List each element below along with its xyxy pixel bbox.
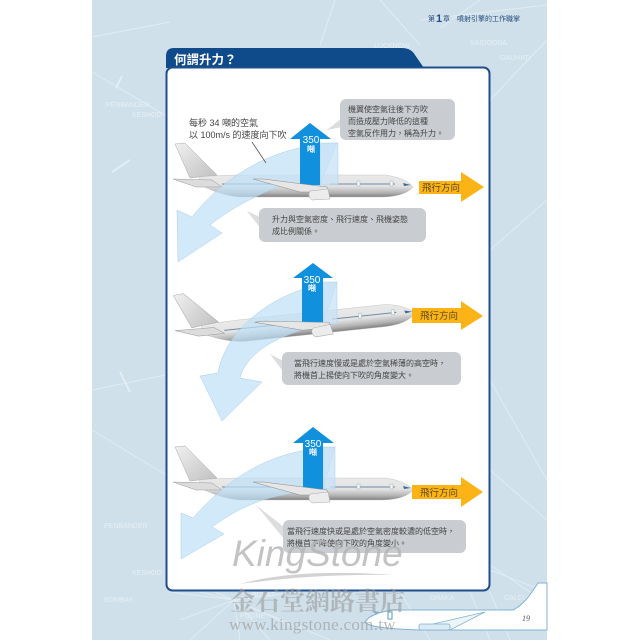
page background: KESHOD xyxy=(132,570,162,577)
callout: fast flight: 將機首下降使向下吹的角度變小。 xyxy=(287,538,407,548)
air label: 以 100m/s 的速度向下吹 xyxy=(189,129,287,140)
page background: CALCUTTA xyxy=(504,595,541,602)
callout: fast flight: 當飛行速度快或是處於空氣密度較濃的低空時， xyxy=(287,526,455,536)
lift volume 2 xyxy=(323,282,337,324)
lift arrow 1 xyxy=(290,123,331,185)
lift volume 1 xyxy=(320,143,338,185)
air label xyxy=(189,117,287,163)
running header: 章 xyxy=(443,14,450,23)
callout: lift definition xyxy=(327,99,455,140)
page background: POONE xyxy=(240,613,266,620)
running header: 噴射引擎的工作職掌 xyxy=(457,14,520,23)
flight direction arrow 2: 飛行方向 xyxy=(420,310,458,322)
heading: 何謂升力？ xyxy=(174,52,237,67)
flight direction arrow 1 xyxy=(419,172,484,202)
watermark: www.kingstone.com.tw xyxy=(229,615,396,634)
flight direction arrow 1: 飛行方向 xyxy=(422,182,460,194)
callout: lift factors: 成比例關係。 xyxy=(272,226,320,236)
running header: 第 xyxy=(428,14,435,23)
page background: GAUHATI xyxy=(500,55,531,62)
flight direction arrow 2 xyxy=(412,301,483,330)
airflow arrow 2 xyxy=(200,282,337,421)
lift arrow 1: 350 xyxy=(303,135,320,146)
page background xyxy=(92,0,547,640)
bottom corner airplane xyxy=(365,583,547,630)
lift arrow 3: 350 xyxy=(305,439,322,450)
flight direction arrow 3 xyxy=(412,477,483,507)
flight direction arrow 3: 飛行方向 xyxy=(420,487,458,499)
lift arrow 3 xyxy=(293,427,334,489)
diagram 3: nose down xyxy=(173,427,483,559)
watermark: KingStone xyxy=(232,533,403,574)
callout: lift factors xyxy=(247,208,426,242)
page background: LUCKNOW xyxy=(374,43,410,50)
callout: lift definition: 而造成壓力降低的這種 xyxy=(348,116,428,126)
lift arrow 3: 噸 xyxy=(309,447,317,457)
airplane 2 xyxy=(171,270,416,348)
watermark xyxy=(229,533,405,634)
running header xyxy=(428,13,520,25)
airflow arrow 3 xyxy=(181,447,335,559)
airplane 1 xyxy=(173,143,413,197)
watermark: 金石堂網路書店 xyxy=(230,588,405,616)
running header: 1 xyxy=(436,13,442,25)
lift volume 3 xyxy=(323,447,335,489)
page background: PENBANDER xyxy=(106,102,150,109)
page background: SURAT xyxy=(252,592,276,599)
folio 19: 19 xyxy=(522,614,530,623)
lift arrow 2: 噸 xyxy=(308,283,316,293)
lift arrow 1: 噸 xyxy=(307,144,315,154)
airplane 3 xyxy=(173,446,413,500)
page background: KESHOD xyxy=(132,112,162,119)
airflow arrow 1 xyxy=(177,143,337,262)
diagram 2: nose up xyxy=(171,263,483,421)
lift arrow 2 xyxy=(293,263,333,324)
callout: slow flight xyxy=(270,352,461,385)
callout: fast flight xyxy=(256,505,466,553)
panel: what is lift xyxy=(166,48,490,590)
callout: lift definition: 空氣反作用力，稱為升力。 xyxy=(348,128,444,138)
callout: slow flight: 將機首上揚使向下吹的角度變大。 xyxy=(294,370,414,380)
callout: lift factors: 升力與空氣密度、飛行速度、飛機姿態 xyxy=(272,214,408,224)
wing and engine 3 xyxy=(253,482,330,503)
page background: PENBANDER xyxy=(104,523,148,530)
wing and engine 2 xyxy=(255,314,333,343)
lift arrow 2: 350 xyxy=(304,275,321,286)
wing and engine 1 xyxy=(253,179,330,200)
page background: DHAKA xyxy=(430,595,454,602)
air label: 每秒 34 噸的空氣 xyxy=(189,117,258,128)
callout: lift definition: 機翼使空氣往後下方吹 xyxy=(348,104,428,114)
page background: BOMBAY xyxy=(104,597,134,604)
page background: SAIDOORA xyxy=(470,40,507,47)
diagram 1: level flight xyxy=(173,99,484,262)
callout: slow flight: 當飛行速度慢或是處於空氣稀薄的高空時， xyxy=(294,358,446,368)
